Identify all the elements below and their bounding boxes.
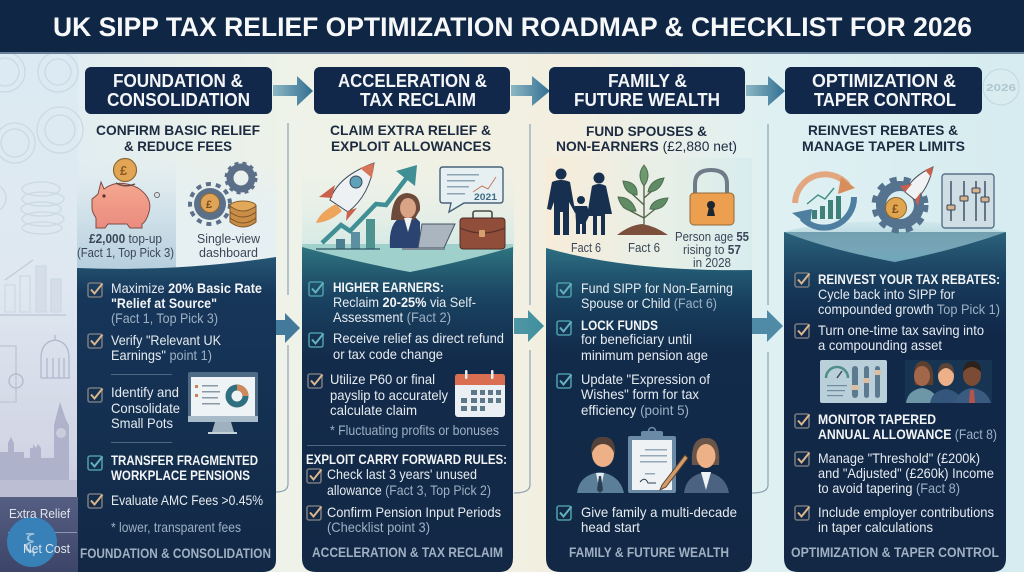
checklist item: expression of wishes: Update "Expression of — [581, 372, 710, 387]
checklist item: pension input periods: Confirm Pension Input Periods — [327, 505, 501, 520]
phase 3 subtitle: FUND SPOUSES & — [586, 123, 707, 139]
checklist item: expression of wishes: Wishes" form for tax — [581, 387, 699, 402]
checklist item: compounding asset: Turn one-time tax saving into — [818, 323, 984, 338]
checklist item: transfer workplace pensions: TRANSFER FRAGMENTED — [111, 453, 258, 468]
checklist item: direct refund: or tax code change — [333, 347, 443, 362]
panel 2 dark body — [302, 245, 513, 572]
panel 4 curved cap — [784, 221, 1006, 262]
checklist item: relevant earnings — [88, 333, 221, 363]
checklist item: lock funds: for beneficiary until — [581, 332, 692, 347]
icon: woman at laptop — [390, 193, 455, 250]
phase 3 heading: FAMILY & — [608, 71, 687, 91]
phase 1 heading: FOUNDATION & — [113, 71, 243, 91]
checklist item: P60 payslip: Utilize P60 or final — [330, 372, 435, 387]
icon captions: dashboard — [199, 246, 258, 260]
panel 1 footer: FOUNDATION & CONSOLIDATION — [80, 546, 271, 561]
arrow: panel 1 to 2 — [276, 313, 300, 343]
checklist item: thresholds: Manage "Threshold" (£200k) — [818, 451, 980, 466]
phase 4 heading: OPTIMIZATION & — [812, 71, 956, 91]
checklist item: expression of wishes: efficiency (point 5) — [581, 403, 689, 418]
checklist item: employer contributions — [795, 505, 994, 535]
heading: carry forward rules: EXPLOIT CARRY FORWARD RULES: — [306, 452, 507, 467]
checklist item: higher earners: Assessment (Fact 2) — [333, 310, 451, 325]
checklist item: non-earning spouse: Spouse or Child (Fact 6) — [581, 296, 717, 311]
phase 1 subtitle — [96, 122, 260, 154]
checklist item: thresholds: to avoid tapering (Fact 8) — [818, 481, 960, 496]
arrow: panel 3 to 4 — [752, 310, 783, 342]
checklist item: head start: head start — [581, 520, 640, 535]
icon: piggy bank with pound coin — [92, 158, 160, 228]
checklist item: higher earners: HIGHER EARNERS: — [333, 280, 444, 295]
checklist item: compounding asset: a compounding asset — [818, 338, 942, 353]
panel 3 dark body — [546, 248, 752, 572]
icon: calendar — [455, 370, 505, 417]
checklist item: lock funds — [557, 318, 708, 363]
checklist item: reinvest rebates — [795, 272, 1000, 317]
icon: sapling — [617, 165, 668, 235]
panel 3 footer: FAMILY & FUTURE WEALTH — [569, 545, 729, 560]
checklist item: AMC fees: Evaluate AMC Fees >0.45% — [111, 493, 263, 508]
checklist item: higher earners — [309, 280, 476, 325]
illustration: three advisors — [905, 360, 992, 403]
checklist item: reinvest rebates: compounded growth Top Pick 1) — [818, 302, 1000, 317]
checklist item: relevant earnings: Verify "Relevant UK — [111, 333, 221, 348]
arrow: phase 1 to 2 — [273, 76, 313, 106]
panel: extra relief versus net cost: ξ — [24, 528, 36, 558]
checklist item: last 3 years — [307, 467, 491, 498]
checklist item: small pots: Consolidate — [111, 401, 180, 416]
phase 2 subtitle: EXPLOIT ALLOWANCES — [331, 138, 491, 154]
checklist item: non-earning spouse — [557, 281, 733, 311]
checklist item: head start — [557, 505, 737, 535]
panel: extra relief versus net cost: Extra Relief — [9, 507, 70, 521]
checklist item: lock funds: LOCK FUNDS — [581, 318, 658, 333]
checklist item: last 3 years: allowance (Fact 3, Top Pick 2) — [327, 483, 491, 498]
icon: growth bars and arrow — [316, 165, 417, 249]
stamp: 2026 — [983, 69, 1019, 105]
note: fluctuating profits: * Fluctuating profits or bonuses — [330, 423, 499, 438]
phase 3 heading: FUTURE WEALTH — [574, 90, 720, 110]
phase 4 heading — [785, 67, 982, 114]
icon: gear with rocket and coin — [874, 167, 933, 231]
checklist item: expression of wishes — [557, 372, 710, 418]
panel: family and future wealth — [546, 67, 752, 572]
checklist item: employer contributions: Include employer contributions — [818, 505, 994, 520]
checklist item: P60 payslip: payslip to accurately — [330, 388, 448, 403]
panel: extra relief versus net cost — [0, 497, 78, 572]
icon: speech bubble with chart: 2021 — [474, 192, 497, 202]
checklist item: small pots — [88, 385, 180, 431]
checklist item: monitor allowance: MONITOR TAPERED — [818, 412, 936, 427]
icon captions — [77, 232, 261, 260]
icon captions: (Fact 1, Top Pick 3) — [77, 246, 174, 260]
phase 1 heading — [85, 67, 272, 114]
icon: gear with rocket and coin: £ — [892, 202, 899, 216]
phase 4 heading: TAPER CONTROL — [814, 90, 956, 110]
checklist item: basic rate: "Relief at Source" — [111, 296, 217, 311]
panel: optimization and taper control — [784, 67, 1006, 572]
panel: foundation and consolidation — [77, 67, 276, 572]
arrow: phase 3 to 4 — [746, 76, 785, 106]
checklist item: basic rate: Maximize 20% Basic Rate — [111, 281, 262, 296]
icon captions: rising to 57 — [683, 243, 741, 257]
icon: padlock — [690, 170, 734, 225]
panel 4 footer: OPTIMIZATION & TAPER CONTROL — [791, 545, 999, 560]
arrow: panel 2 to 3 — [514, 310, 544, 342]
checklist item: head start: Give family a multi-decade — [581, 505, 737, 520]
phase 2 subtitle: CLAIM EXTRA RELIEF & — [330, 122, 491, 138]
silhouette: Big Ben and Parliament — [0, 402, 78, 497]
checklist item: transfer workplace pensions — [88, 453, 258, 483]
panel: acceleration and tax reclaim — [302, 67, 514, 572]
icon captions: Person age 55 — [675, 230, 749, 244]
checklist item: P60 payslip — [308, 372, 448, 418]
checklist item: direct refund — [309, 331, 504, 362]
background illustrations: coins, bars and London skyline — [0, 52, 83, 572]
panel 2 footer: ACCELERATION & TAX RECLAIM — [312, 545, 503, 560]
icon: cycle arrows with chart — [792, 174, 855, 228]
checklist item: thresholds: and "Adjusted" (£260k) Income — [818, 466, 994, 481]
checklist item: basic rate — [88, 281, 262, 326]
phase 4 subtitle: REINVEST REBATES & — [808, 122, 958, 138]
phase 3 heading — [549, 67, 745, 114]
icon: gears and coins: £ — [206, 199, 212, 211]
panel 1 upper background — [77, 158, 276, 270]
phase 2 subtitle — [330, 122, 491, 154]
checklist item: higher earners: Reclaim 20-25% via Self- — [333, 295, 476, 310]
icon captions: Fact 6 — [628, 241, 660, 255]
phase 3 subtitle — [556, 123, 737, 154]
illustration: couple with signed form — [577, 428, 729, 493]
panel 2 upper background — [302, 158, 514, 253]
phase 1 subtitle: & REDUCE FEES — [124, 138, 232, 154]
checklist item: P60 payslip: calculate claim — [330, 403, 417, 418]
panel 1 dark body — [77, 257, 276, 572]
note: lower fees: * lower, transparent fees — [111, 520, 241, 535]
icon: family silhouette — [547, 168, 612, 235]
phase 2 heading — [314, 67, 510, 114]
panel 3 upper background — [546, 158, 752, 271]
phase 4 subtitle: MANAGE TAPER LIMITS — [802, 138, 965, 154]
phase 1 subtitle: CONFIRM BASIC RELIEF — [96, 122, 260, 138]
connector brackets between columns — [276, 123, 768, 493]
checklist item: direct refund: Receive relief as direct refund — [333, 331, 504, 346]
phase 4 subtitle — [802, 122, 965, 154]
checklist item: transfer workplace pensions: WORKPLACE PENSIONS — [111, 468, 250, 483]
checklist item: employer contributions: in taper calculations — [818, 520, 933, 535]
checklist item: thresholds — [795, 451, 994, 496]
checklist item: last 3 years: Check last 3 years' unused — [327, 467, 477, 482]
icon: gauge and sliders card — [820, 360, 887, 403]
arrow: phase 2 to 3 — [511, 76, 550, 106]
checklist item: small pots: Small Pots — [111, 416, 173, 431]
checklist item: reinvest rebates: Cycle back into SIPP for — [818, 287, 955, 302]
panel: extra relief versus net cost: Net Cost — [23, 542, 70, 556]
title: UK SIPP TAX RELIEF OPTIMIZATION ROADMAP & CHECKLIST FOR 2026 — [53, 12, 972, 42]
stamp: 2026: 2026 — [986, 82, 1016, 94]
checklist item: pension input periods: (Checklist point 3) — [327, 520, 430, 535]
icon: speech bubble with chart — [440, 167, 503, 212]
checklist item: small pots: Identify and — [111, 385, 179, 400]
icon captions — [571, 230, 749, 270]
checklist item: non-earning spouse: Fund SIPP for Non-Earning — [581, 281, 733, 296]
panel 2 curved cap — [302, 244, 513, 272]
panel 4 dark body — [784, 232, 1006, 572]
icon: gears and coins — [190, 163, 256, 227]
phase 2 heading: ACCELERATION & — [338, 71, 487, 91]
icon: rocket — [316, 163, 374, 223]
checklist item: basic rate: (Fact 1, Top Pick 3) — [111, 311, 218, 326]
icon captions: £2,000 top-up — [89, 232, 162, 246]
header bar — [0, 0, 1024, 52]
checklist item: pension input periods — [307, 505, 501, 535]
icon: sliders panel — [942, 174, 994, 228]
icon captions: Fact 6 — [571, 241, 601, 255]
icon: briefcase — [460, 211, 505, 249]
checklist item: monitor allowance: ANNUAL ALLOWANCE (Fact 8) — [818, 427, 997, 442]
checklist item: lock funds: minimum pension age — [581, 348, 708, 363]
icon: piggy bank with pound coin: £ — [120, 163, 128, 178]
checklist item: compounding asset — [795, 323, 984, 353]
icon: dashboard monitor — [188, 372, 258, 434]
phase 3 subtitle: NON-EARNERS (£2,880 net) — [556, 138, 737, 154]
phase 1 heading: CONSOLIDATION — [107, 90, 250, 110]
icon captions: Single-view — [197, 232, 261, 246]
checklist item: monitor allowance — [795, 412, 997, 442]
checklist item: relevant earnings: Earnings" point 1) — [111, 348, 212, 363]
icon captions: in 2028 — [693, 256, 731, 270]
phase 2 heading: TAX RECLAIM — [360, 90, 476, 110]
